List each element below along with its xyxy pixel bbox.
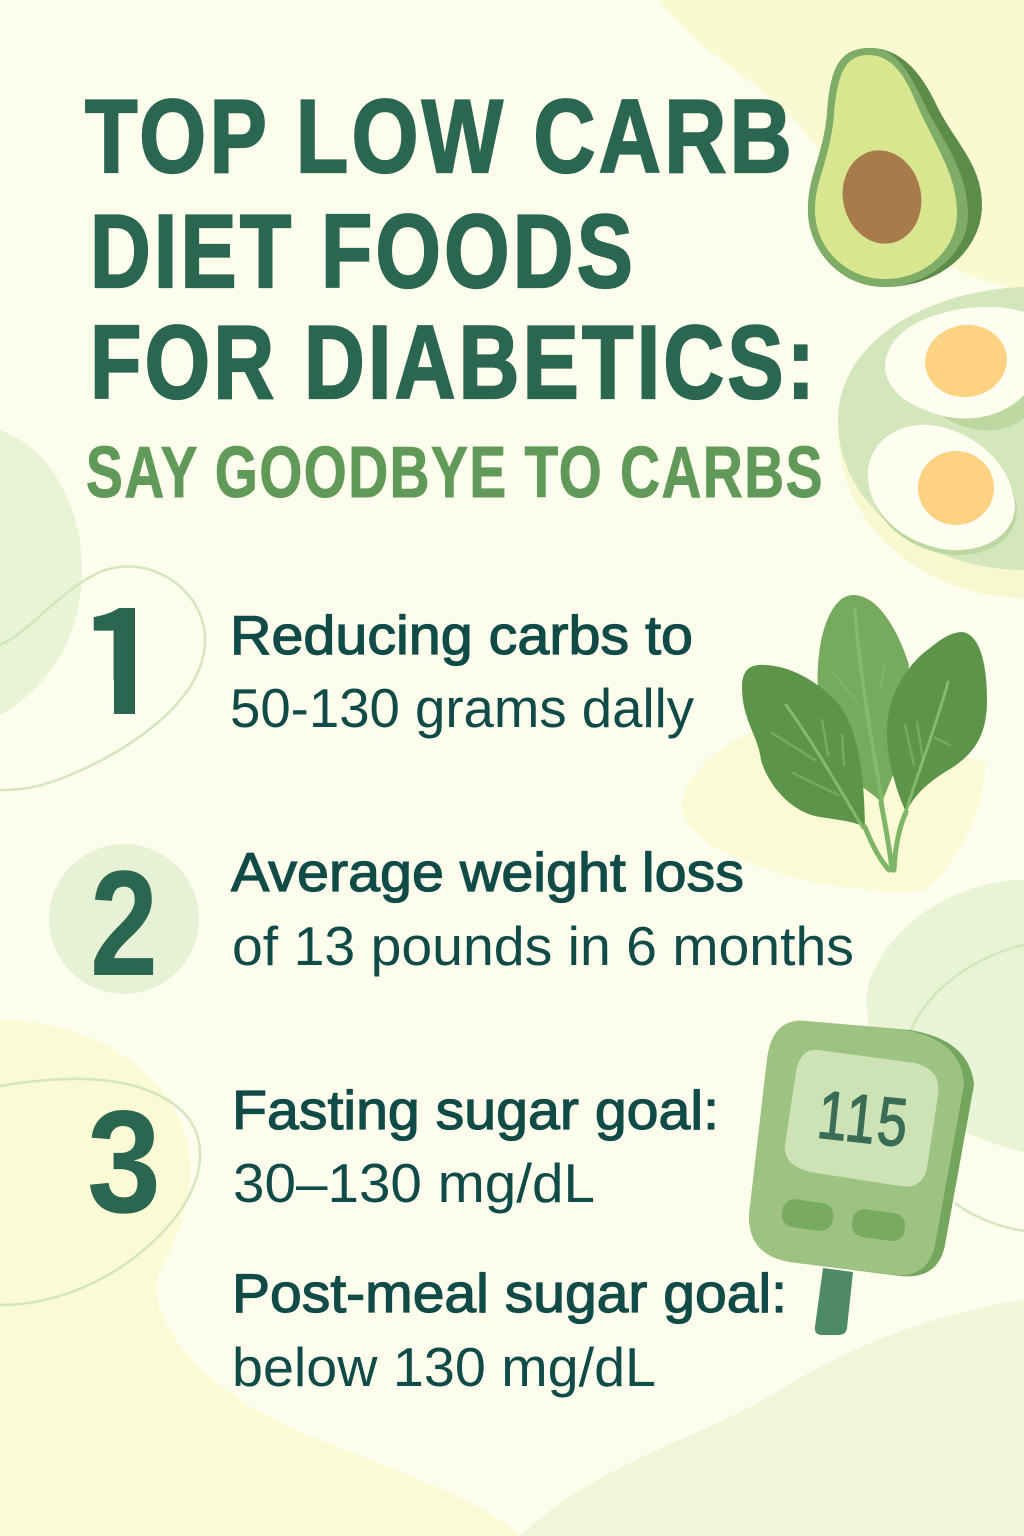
item 3 number: 3 xyxy=(87,1080,161,1243)
title xyxy=(85,79,818,421)
item 1 number: 1 xyxy=(78,544,165,757)
title: TOP LOW CARB xyxy=(85,79,795,195)
item 2 text: of 13 pounds in 6 months xyxy=(232,915,854,977)
item 2 text xyxy=(231,841,854,977)
meter reading: 115 xyxy=(814,1077,914,1162)
item 2 badge xyxy=(49,844,199,994)
item 3 text xyxy=(232,1079,787,1398)
icon: glucose meter xyxy=(749,1021,974,1335)
item 3 text: Post-meal sugar goal: xyxy=(232,1262,787,1324)
item 2 number: 2 xyxy=(90,839,158,1007)
icon: avocado xyxy=(808,48,982,287)
item 1 text: Reducing carbs to xyxy=(230,604,693,666)
icon: eggs xyxy=(838,287,1024,570)
item 3 text: below 130 mg/dL xyxy=(232,1336,656,1398)
item 3 text: Fasting sugar goal: xyxy=(232,1079,719,1141)
icon: spinach xyxy=(742,595,987,870)
item 1 text: 50-130 grams dally xyxy=(230,677,694,739)
title: DIET FOODS xyxy=(90,194,636,310)
item 2 text: Average weight loss xyxy=(231,841,744,903)
item 1 text xyxy=(230,604,694,739)
item 3 text: 30–130 mg/dL xyxy=(233,1152,595,1214)
title: FOR DIABETICS: xyxy=(90,305,818,421)
subtitle: SAY GOODBYE TO CARBS xyxy=(86,433,824,513)
